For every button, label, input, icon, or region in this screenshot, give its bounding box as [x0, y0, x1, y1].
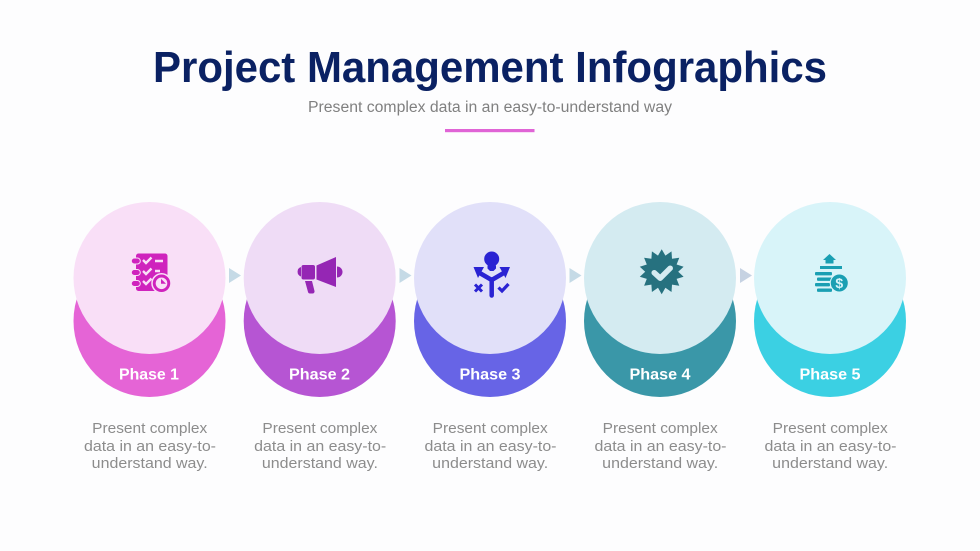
phase 4 description: Present complex	[603, 420, 718, 437]
phase 4 label: Phase 4	[630, 366, 691, 384]
phase 2 light circle	[244, 202, 396, 354]
phase 2 description: data in an easy-to-	[254, 438, 386, 455]
phase 3 light circle	[414, 202, 566, 354]
arrow: phase 1 to phase 2	[229, 268, 241, 283]
icon: verified badge	[640, 249, 684, 294]
phase 2 dark circle	[244, 245, 396, 397]
phase 4 description	[594, 420, 726, 472]
icon: megaphone	[298, 257, 342, 294]
title: Project Management Infographics	[153, 43, 827, 92]
panel: phase 2	[244, 202, 396, 472]
panel: phase 5	[754, 202, 906, 472]
arrow: phase 3 to phase 4	[570, 268, 582, 283]
panel: phase 1	[74, 202, 226, 472]
arrow: phase 2 to phase 3	[400, 268, 412, 283]
phase 1 dark circle	[74, 245, 226, 397]
panel: phase 4	[584, 202, 736, 472]
phase 4 description: data in an easy-to-	[594, 438, 726, 455]
phase 2 description: Present complex	[262, 420, 378, 437]
phase 5 description: understand way.	[772, 455, 888, 472]
phase 5 label: Phase 5	[800, 366, 861, 384]
phase 1 light circle	[74, 202, 226, 354]
subtitle: Present complex data in an easy-to-understand way	[308, 99, 672, 116]
phase 1 description: Present complex	[92, 420, 208, 437]
phase 1 description: data in an easy-to-	[84, 438, 216, 455]
panel: phase 3	[414, 202, 566, 472]
phase 2 label: Phase 2	[289, 366, 350, 384]
phase 4 description: understand way.	[602, 455, 718, 472]
phase 3 description: data in an easy-to-	[424, 438, 556, 455]
icon: coin stack with up arrow	[815, 254, 848, 292]
phase 2 description: understand way.	[262, 455, 378, 472]
phase 3 label: Phase 3	[460, 366, 521, 384]
phase 3 description	[424, 420, 556, 472]
phase 5 description: data in an easy-to-	[764, 438, 896, 455]
phase 4 light circle	[584, 202, 736, 354]
phase 3 dark circle	[414, 245, 566, 397]
phase 5 dark circle	[754, 245, 906, 397]
phase 1 label: Phase 1	[119, 366, 179, 384]
phase 2 description	[254, 420, 386, 472]
icon: checklist notebook with clock	[131, 254, 171, 293]
phase 5 light circle	[754, 202, 906, 354]
phase 4 dark circle	[584, 245, 736, 397]
arrow: phase 4 to phase 5	[740, 268, 752, 283]
icon: decision arrows with light bulb	[474, 252, 510, 296]
phase 5 description: Present complex	[773, 420, 888, 437]
phase 3 description: understand way.	[432, 455, 548, 472]
phase 5 description	[764, 420, 896, 472]
phase 3 description: Present complex	[433, 420, 548, 437]
title underline accent	[445, 129, 534, 132]
phase 1 description	[84, 420, 216, 472]
icon: coin stack with up arrow: $	[835, 275, 843, 291]
phase 1 description: understand way.	[92, 455, 208, 472]
